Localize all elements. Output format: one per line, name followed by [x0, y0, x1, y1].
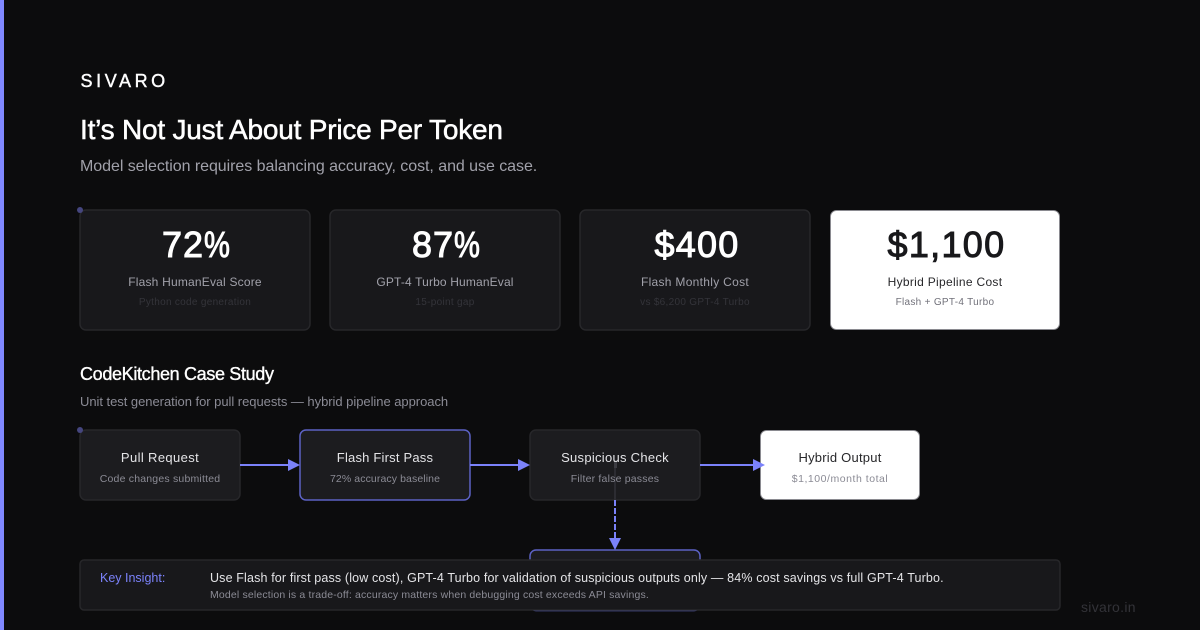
stat card: flash score: % — [204, 224, 231, 265]
stat card: gpt-4 turbo score: 87 — [412, 224, 454, 265]
section heading: CodeKitchen Case Study — [80, 364, 274, 384]
node: flash first pass: Flash First Pass — [337, 450, 433, 465]
node: flash first pass — [299, 429, 471, 501]
stat card: flash score: Flash HumanEval Score — [128, 275, 262, 289]
node: hybrid output: Hybrid Output — [798, 450, 882, 465]
stat card: flash cost: vs $6,200 GPT-4 Turbo — [640, 297, 750, 308]
insight secondary text: Model selection is a trade-off: accuracy matters when debugging cost exceeds API savings. — [210, 589, 649, 601]
key insight label: Key Insight: — [100, 571, 165, 585]
accent bar — [0, 0, 4, 630]
node: pull request — [79, 429, 241, 501]
marker dot: stats — [77, 207, 83, 213]
node: suspicious check: Filter false passes — [571, 473, 659, 485]
stat card: flash score: Python code generation — [139, 297, 251, 308]
node: hybrid output: $1,100/month total — [792, 473, 888, 485]
brand wordmark: SIVARO — [80, 71, 169, 91]
node: pull request: Code changes submitted — [100, 473, 220, 485]
stat card: flash score: 72 — [162, 224, 204, 265]
stat card: flash cost — [579, 209, 811, 331]
stat card: gpt-4 turbo score: % — [454, 224, 481, 265]
stat card: hybrid cost — [830, 210, 1060, 330]
stat card: hybrid cost: $1,100 — [888, 224, 1005, 265]
stat card: gpt-4 turbo score: GPT-4 Turbo HumanEval — [376, 275, 514, 289]
node: suspicious check — [529, 429, 701, 501]
stat card: flash score — [79, 209, 311, 331]
node: flash first pass: 72% accuracy baseline — [330, 473, 440, 485]
stat card: gpt-4 turbo score: 15-point gap — [415, 297, 475, 308]
marker dot: pipeline — [77, 427, 83, 433]
stat card: hybrid cost: Hybrid Pipeline Cost — [888, 275, 1002, 289]
footer url: sivaro.in — [1081, 599, 1136, 615]
stat card: flash cost: $400 — [655, 224, 739, 265]
stat card: hybrid cost: Flash + GPT-4 Turbo — [896, 297, 994, 308]
node: hybrid output — [760, 430, 920, 500]
insight main text: Use Flash for first pass (low cost), GPT-4 Turbo for validation of suspicious outputs only — 84% cost savings vs full GPT-4 Turbo. — [210, 571, 944, 585]
title: It’s Not Just About Price Per Token — [80, 114, 503, 145]
key insight panel — [79, 559, 1061, 611]
node: pull request: Pull Request — [121, 450, 199, 465]
stat card: flash cost: Flash Monthly Cost — [641, 275, 749, 289]
node: validation (mostly covered) — [529, 549, 701, 612]
subtitle: Model selection requires balancing accuracy, cost, and use case. — [80, 158, 537, 175]
node: suspicious check: Suspicious Check — [561, 450, 669, 465]
section subheading: Unit test generation for pull requests — hybrid pipeline approach — [80, 394, 448, 409]
stat card: gpt-4 turbo score — [329, 209, 561, 331]
